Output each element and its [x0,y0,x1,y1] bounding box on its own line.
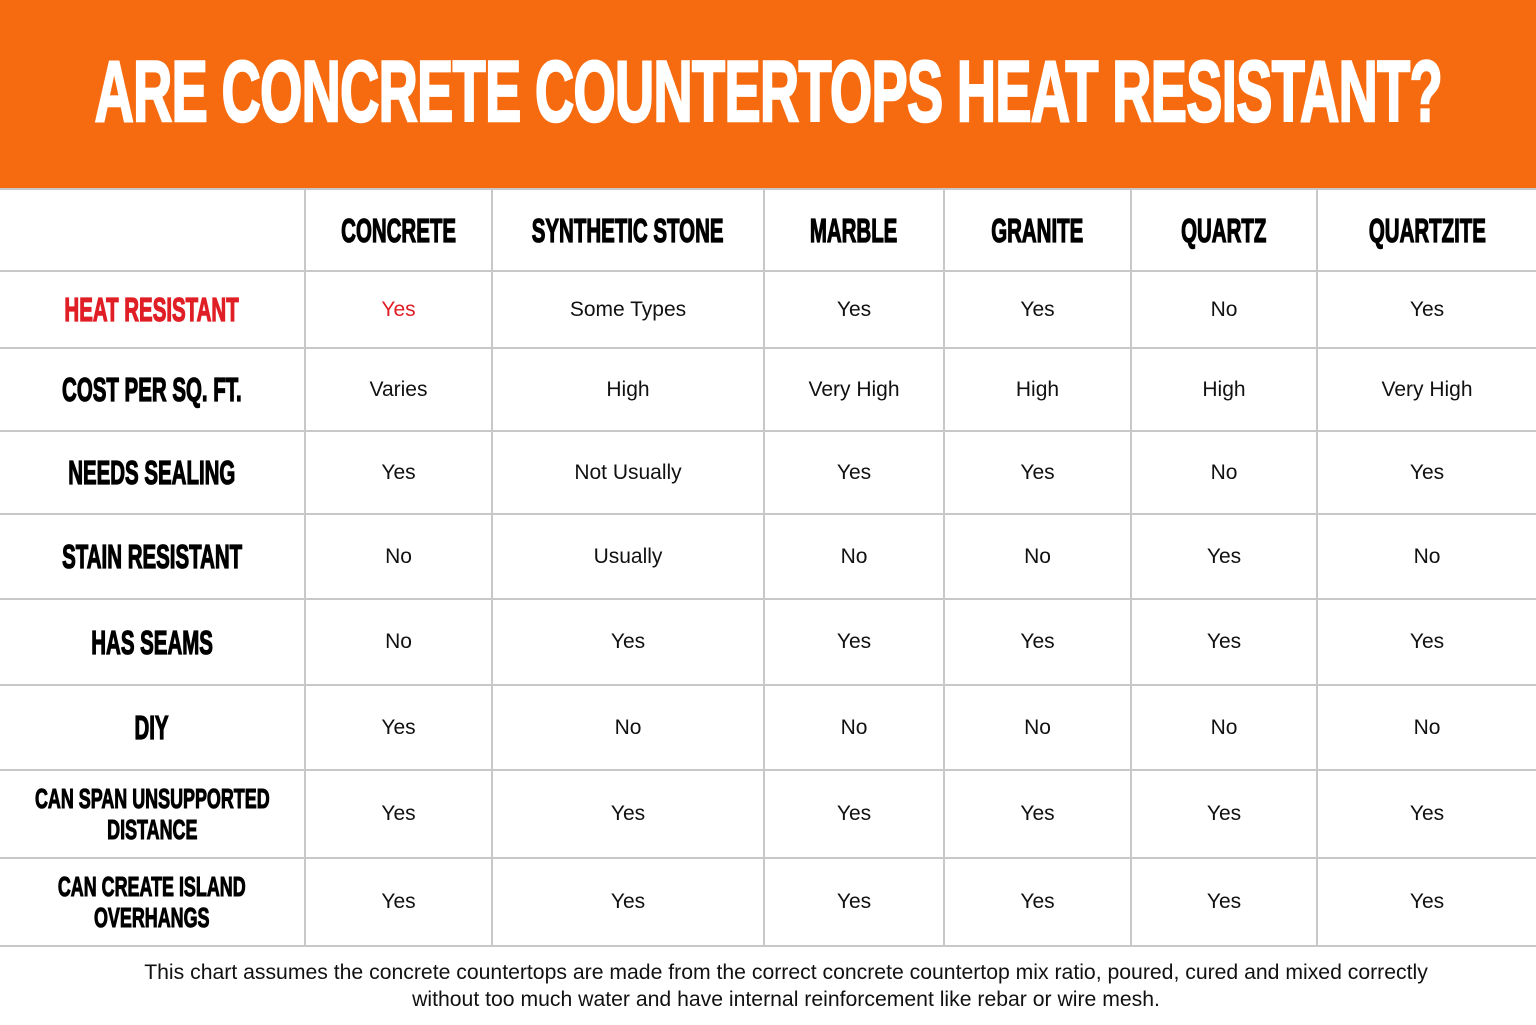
comparison table: Yes [1020,298,1055,320]
comparison table: DIY [135,709,169,746]
comparison table [0,188,1536,945]
comparison table: No [1211,298,1237,320]
comparison table: Yes [381,716,416,738]
comparison table: Yes [1207,630,1241,653]
comparison table: No [1414,716,1440,738]
comparison table: Yes [1410,460,1444,484]
comparison table: Yes [1410,298,1444,320]
comparison table: Some Types [570,298,686,320]
comparison table: Varies [370,378,427,400]
comparison table: No [1211,716,1237,738]
comparison table: Yes [837,630,871,653]
comparison table: Very High [1381,378,1473,400]
comparison table: High [606,378,650,400]
comparison table: COST PER SQ. FT. [62,371,242,408]
comparison table: Usually [594,544,662,568]
comparison table: STAIN RESISTANT [62,538,242,575]
comparison table: Yes [1207,890,1241,913]
comparison table: Not Usually [574,460,682,484]
footnote [144,961,1428,1011]
comparison table: Yes [381,460,416,484]
footnote: without too much water and have internal reinforcement like rebar or wire mesh. [412,988,1160,1011]
comparison table: HAS SEAMS [91,624,213,660]
title [0,0,1536,188]
comparison table: Yes [1020,630,1055,653]
comparison table: Yes [837,298,871,320]
comparison table: Yes [1410,630,1444,653]
comparison table: High [1202,378,1246,400]
comparison table: Yes [381,802,416,825]
comparison table: Yes [1410,802,1444,825]
comparison table: No [385,630,412,653]
comparison table: QUARTZ [1181,212,1267,248]
comparison table: Yes [1410,890,1444,913]
footnote: This chart assumes the concrete countertops are made from the correct concrete countertop mix ratio, poured, cured and mixed correctly [144,961,1428,984]
comparison table: No [841,544,867,568]
comparison table: Yes [1020,802,1055,825]
comparison table: No [1024,716,1051,738]
comparison table: No [1414,544,1440,568]
comparison table: No [1211,460,1237,484]
comparison table: HEAT RESISTANT [65,291,239,328]
comparison table: Yes [1020,890,1055,913]
comparison table: CAN CREATE ISLAND [58,871,246,902]
comparison table: CONCRETE [341,212,456,248]
comparison table: Yes [611,802,645,825]
comparison table: DISTANCE [107,814,197,845]
comparison table: Yes [381,298,416,320]
comparison table: NEEDS SEALING [68,454,236,491]
comparison table: CAN SPAN UNSUPPORTED [35,783,269,814]
comparison table: GRANITE [991,212,1084,248]
comparison table: SYNTHETIC STONE [532,212,724,248]
comparison table: Yes [1207,544,1241,568]
comparison table: Yes [837,460,871,484]
comparison table: Yes [837,890,871,913]
comparison table: MARBLE [810,212,898,248]
comparison table: Yes [611,890,645,913]
comparison table: Yes [611,630,645,653]
comparison table: QUARTZITE [1368,212,1486,248]
title: ARE CONCRETE COUNTERTOPS HEAT RESISTANT? [94,44,1442,140]
comparison table: No [1024,544,1051,568]
comparison table: Very High [808,378,900,400]
comparison table: Yes [1207,802,1241,825]
comparison table: No [615,716,641,738]
comparison table: OVERHANGS [94,902,210,933]
comparison table: Yes [1020,460,1055,484]
comparison table: No [841,716,867,738]
comparison table: No [385,544,412,568]
comparison table: Yes [381,890,416,913]
comparison table: High [1016,378,1059,400]
comparison table: Yes [837,802,871,825]
